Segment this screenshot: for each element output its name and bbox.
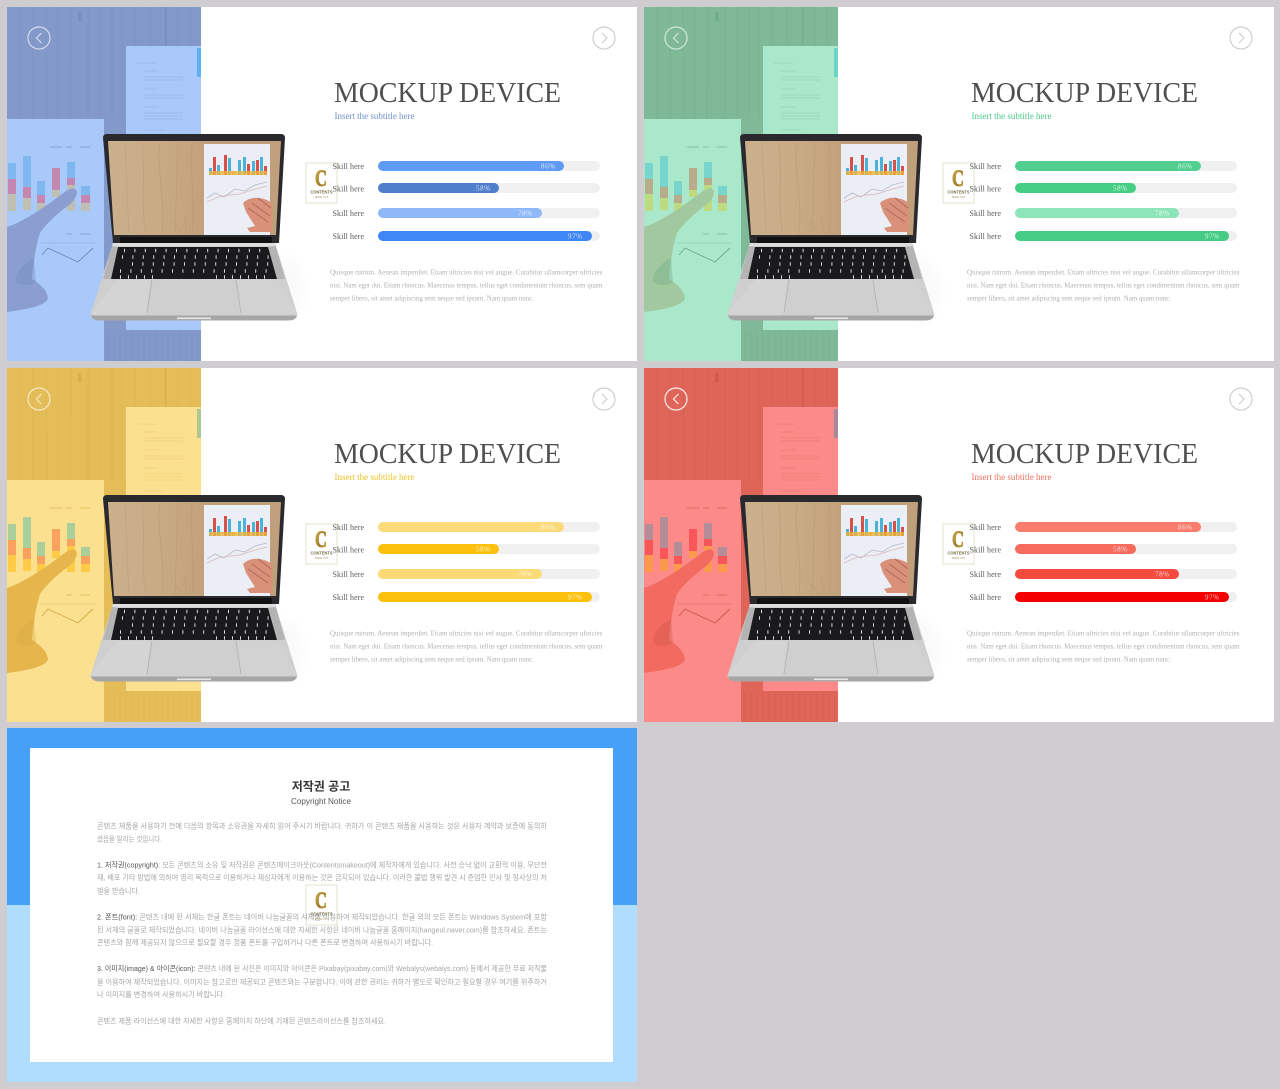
skill bar chart: 78%	[518, 210, 532, 218]
skill bar chart: 97%	[1205, 594, 1219, 602]
panel: green slide	[644, 7, 1274, 361]
body text: nisi. Nam eget dui. Etiam rhoncus. Maecenas tempus, tellus eget condimentum rhoncus, sem quam	[967, 642, 1240, 650]
body text	[330, 268, 603, 302]
notice body text: 을 이용하여 제작되었습니다. 이미지는 참고로만 제공되고 콘텐츠와는 구분합니다. 이에 관한 권리는 귀하가 별도로 확인하고 필요할 경우 여기를 위주하거	[97, 976, 547, 986]
body text	[967, 630, 1240, 664]
title: MOCKUP DEVICE	[334, 438, 561, 470]
body text: semper libero, sit amet adipiscing sem neque sed ipsum. Nam quam nunc.	[967, 656, 1171, 664]
notice body text: 셨음을 알리는 것입니다.	[97, 834, 162, 844]
notice body text: 3. 이미지(image) & 아이콘(icon): 콘텐츠 내에 된 사진은 이미지와 아이콘은 Pixabay(pixabay.com)와 Webalys(webalys.com) 등에서 제공한 무료 저작물	[97, 963, 547, 973]
body text: Quisque rutrum. Aenean imperdiet. Etiam ultricies nisi vel augue. Curabitur ullamcorper ultricies	[330, 268, 603, 276]
notice heading: 저작권 공고	[292, 778, 350, 794]
notice body text	[97, 820, 547, 1026]
icon: next arrow	[593, 388, 615, 410]
laptop mockup	[728, 134, 940, 322]
notice body text: 콘텐츠 제품을 사용하기 전에 다음의 항목과 소유권을 자세히 읽어 주시기 바랍니다. 귀하가 이 콘텐츠 제품을 사용하는 것은 사용자 계약과 보증에 동의하	[97, 820, 547, 830]
skill bar chart: Skill here	[970, 184, 1001, 194]
skill bar chart: 86%	[541, 524, 555, 532]
skill bar chart: 97%	[568, 594, 582, 602]
icon: previous arrow	[665, 27, 687, 49]
skill bar chart: Skill here	[970, 523, 1001, 532]
skill bar chart: 58%	[1113, 184, 1127, 192]
skill bar chart: Skill here	[332, 232, 364, 241]
photo collage: wood desk, papers and pointing hand	[644, 368, 838, 722]
skill bar chart: 78%	[1155, 570, 1169, 578]
skill bar chart: 78%	[518, 570, 532, 578]
body text: Quisque rutrum. Aenean imperdiet. Etiam ultricies nisi vel augue. Curabitur ullamcorper ultricies	[967, 630, 1240, 638]
skill bar chart: Skill here	[970, 593, 1001, 602]
skill bar chart: 86%	[541, 162, 555, 170]
notice body text: 1. 저작권(copyright): 모든 콘텐츠의 소유 및 저작권은 콘텐츠메이크아웃(Contentsmakeout)에 제작자에게 있습니다. 사전 승낙 없이 교환적 이용, 무단전	[97, 860, 547, 870]
skill bar chart: 58%	[476, 184, 490, 192]
skill bar chart: Skill here	[332, 570, 364, 579]
body text: Quisque rutrum. Aenean imperdiet. Etiam ultricies nisi vel augue. Curabitur ullamcorper ultricies	[330, 630, 603, 638]
subtitle: Insert the subtitle here	[972, 472, 1052, 482]
skill bar chart	[970, 161, 1237, 241]
body text: nisi. Nam eget dui. Etiam rhoncus. Maecenas tempus, tellus eget condimentum rhoncus, sem quam	[330, 282, 603, 290]
skill bar chart: Skill here	[970, 546, 1001, 554]
watermark logo	[943, 163, 974, 203]
skill bar chart: Skill here	[970, 162, 1001, 171]
subtitle: Insert the subtitle here	[334, 111, 414, 121]
body text: semper libero, sit amet adipiscing sem neque sed ipsum. Nam quam nunc.	[967, 294, 1171, 302]
notice body text: 콘텐츠와 함께 제공되지 않으므로 필요할 경우 정품 폰트를 구입하거나 다른 폰트로 변경하여 사용하시기 바랍니다.	[97, 937, 433, 947]
skill bar chart: Skill here	[970, 209, 1001, 218]
skill bar chart	[332, 161, 600, 241]
skill bar chart: Skill here	[332, 162, 364, 171]
photo collage: wood desk, papers and pointing hand	[7, 368, 201, 722]
watermark logo	[306, 885, 337, 925]
panel: copyright notice slide	[7, 728, 637, 1082]
laptop mockup	[728, 495, 940, 683]
body text: nisi. Nam eget dui. Etiam rhoncus. Maecenas tempus, tellus eget condimentum rhoncus, sem quam	[967, 282, 1240, 290]
icon: next arrow	[593, 27, 615, 49]
skill bar chart: Skill here	[332, 523, 364, 532]
skill bar chart: Skill here	[332, 546, 364, 554]
skill bar chart: 86%	[1178, 524, 1192, 532]
watermark logo	[943, 524, 974, 564]
title: MOCKUP DEVICE	[334, 77, 561, 109]
title: MOCKUP DEVICE	[971, 438, 1198, 470]
skill bar chart: Skill here	[970, 232, 1001, 241]
skill bar chart: 97%	[1205, 232, 1219, 240]
watermark logo	[306, 524, 337, 564]
skill bar chart: Skill here	[332, 209, 364, 218]
laptop mockup	[90, 134, 303, 322]
panel: red slide	[644, 368, 1274, 722]
icon: next arrow	[1230, 388, 1252, 410]
laptop mockup	[90, 495, 303, 683]
skill bar chart: 86%	[1178, 162, 1192, 170]
subtitle: Insert the subtitle here	[972, 111, 1052, 121]
body text: semper libero, sit amet adipiscing sem neque sed ipsum. Nam quam nunc.	[330, 294, 534, 302]
icon: next arrow	[1230, 27, 1252, 49]
notice body text: 2. 폰트(font): 콘텐츠 내에 된 서체는 한글 폰트는 네이버 나눔글꼴의 서체를 이용하여 제작되었습니다. 한글 외의 모든 폰트는 Windows System에 포함	[97, 912, 547, 922]
watermark logo	[306, 163, 337, 203]
title: MOCKUP DEVICE	[971, 77, 1198, 109]
notice body text: 나 이미지를 변경하여 사용하시기 바랍니다.	[97, 989, 225, 999]
body text: semper libero, sit amet adipiscing sem neque sed ipsum. Nam quam nunc.	[330, 656, 534, 664]
icon: previous arrow	[28, 27, 50, 49]
body text	[967, 268, 1240, 302]
photo collage: wood desk, papers and pointing hand	[644, 7, 838, 361]
skill bar chart: 58%	[1113, 546, 1127, 554]
skill bar chart: Skill here	[332, 184, 364, 194]
notice subheading: Copyright Notice	[291, 796, 351, 806]
body text	[330, 630, 603, 664]
icon: previous arrow	[28, 388, 50, 410]
skill bar chart: 78%	[1155, 210, 1169, 218]
skill bar chart: 58%	[476, 546, 490, 554]
body text: nisi. Nam eget dui. Etiam rhoncus. Maecenas tempus, tellus eget condimentum rhoncus, sem quam	[330, 642, 603, 650]
subtitle: Insert the subtitle here	[334, 472, 414, 482]
notice body text: 벌을 받습니다.	[97, 886, 140, 896]
skill bar chart	[332, 522, 600, 602]
body text: Quisque rutrum. Aenean imperdiet. Etiam ultricies nisi vel augue. Curabitur ullamcorper ultricies	[967, 268, 1240, 276]
skill bar chart: Skill here	[332, 593, 364, 602]
skill bar chart: Skill here	[970, 570, 1001, 579]
notice body text: 콘텐츠 제품 라이선스에 대한 자세한 사항은 홈페이지 하단에 기재된 콘텐츠라이선스를 참조하세요.	[97, 1016, 386, 1026]
panel: yellow slide	[7, 368, 637, 722]
panel: blue slide	[7, 7, 637, 361]
notice body text: 된 서체의 글꼴로 제작되었습니다. 네이버 나눔글꼴 라이선스에 대한 자세한 사항은 네이버 나눔글꼴 홈페이지(hangeul.naver.com)를 참조하세요. 폰트는	[97, 924, 547, 934]
skill bar chart: 97%	[568, 232, 582, 240]
photo collage: wood desk, papers and pointing hand	[7, 7, 201, 361]
notice body text: 재, 배포 기타 방법에 의하여 영리 목적으로 이용하거나 제삼자에게 이용하는 것은 금지되어 있습니다. 이러한 불법 행위 발견 시 준엄한 민사 및 형사상의 처	[97, 872, 547, 882]
icon: previous arrow	[665, 388, 687, 410]
skill bar chart	[970, 522, 1237, 602]
